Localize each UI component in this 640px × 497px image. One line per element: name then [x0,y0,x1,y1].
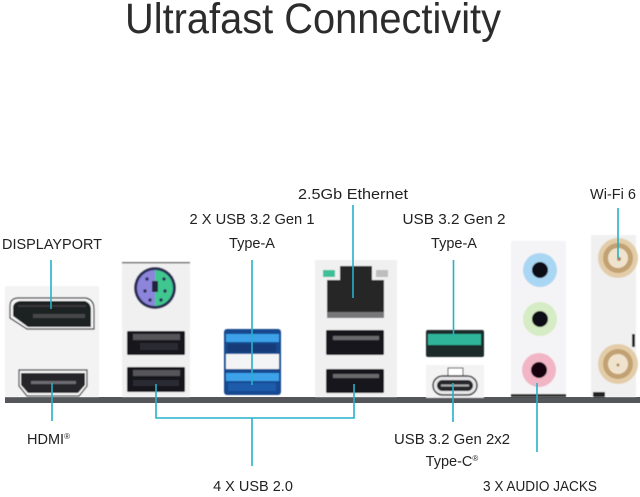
label: HDMI: HDMI [27,432,64,448]
icon: HDMI connector [19,370,87,396]
icon: USB 2.0 upper [326,330,384,355]
label: USB 3.2 Gen 1 [190,212,314,252]
label: USB 3.2 Gen 2 [402,212,506,252]
connector lines [51,205,618,466]
label: USB 3.2 Gen 2: Type-A [431,236,477,252]
label: Wi-Fi 6: Wi-Fi 6 [590,187,636,203]
label: USB 3.2 Gen 2x2: Type-C [426,454,472,470]
icon: PS/2 port [134,267,176,309]
panel: audio jacks [511,241,566,397]
icon: green jack [523,302,557,336]
panel: ethernet and USB 2.0 [315,260,397,397]
panel: PS/2 and USB 2.0 [122,262,190,397]
icon: USB 2.0 lower [127,367,185,392]
icon: USB-C port [426,365,484,398]
icon: link LEDs [323,270,388,277]
icon: pink jack [522,353,556,387]
icon: blue USB 3.2 Gen 1 stack [224,329,281,395]
icon: green USB 3.2 Gen 2 Type-A [426,330,484,357]
label: HDMI: ® [64,432,70,441]
label: USB 3.2 Gen 2: USB 3.2 Gen 2 [402,212,506,228]
label: USB 3.2 Gen 2x2: ® [472,454,478,463]
icon: USB 2.0 lower [326,369,384,393]
label: USB 3.2 Gen 2x2 [394,432,510,470]
icon: blue jack [523,253,557,287]
label: audio jacks: 3 X AUDIO JACKS [483,479,597,495]
icon: antenna connector bottom [598,344,638,384]
board edge bar [5,397,640,403]
icon: antenna connector top [598,238,638,278]
label: Ethernet: 2.5Gb Ethernet [298,187,408,203]
panel: displayport and HDMI [5,286,99,397]
label: USB 3.2 Gen 2x2: USB 3.2 Gen 2x2 [394,432,510,448]
label: DISPLAYPORT: DISPLAYPORT [2,237,102,253]
label: USB 3.2 Gen 1: 2 X USB 3.2 Gen 1 [190,212,314,228]
label: USB 3.2 Gen 1: Type-A [229,236,275,252]
panel: Wi-Fi antennas [591,235,638,397]
icon: displayport connector [10,298,94,329]
icon: USB 2.0 upper [127,331,185,355]
label: USB 2.0: 4 X USB 2.0 [213,479,293,495]
icon: RJ45 port [327,266,384,318]
